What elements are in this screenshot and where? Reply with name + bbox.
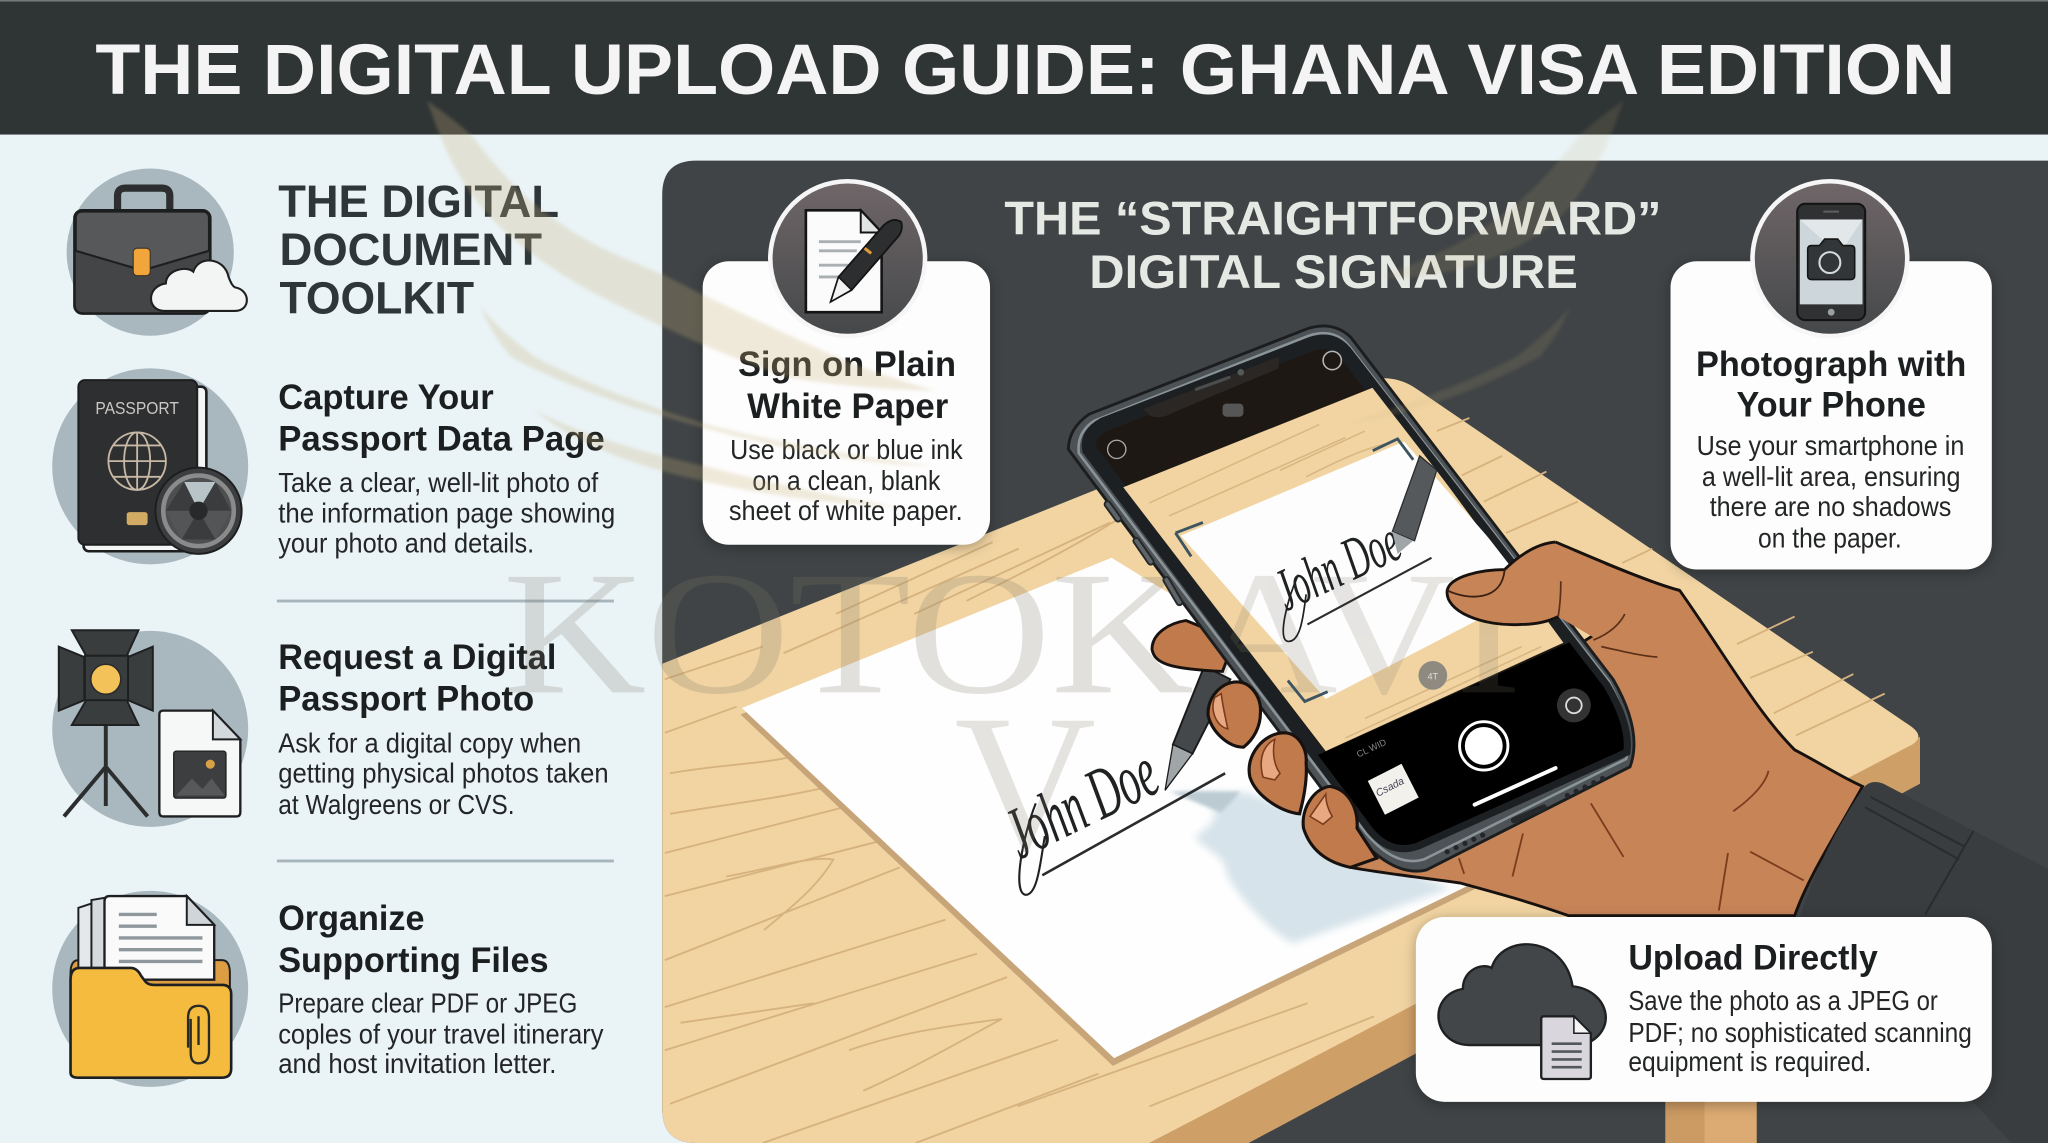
illustration: smartphone: CL WID bbox=[1355, 737, 1388, 759]
step: capture your passport data page: Capture Your bbox=[278, 378, 494, 417]
step: organize supporting files: Organize bbox=[278, 899, 424, 938]
callout: upload directly bbox=[1416, 917, 1992, 1102]
title banner bbox=[0, 0, 2048, 135]
heading: the digital document toolkit: TOOLKIT bbox=[280, 273, 474, 324]
step: organize supporting files: coples of your travel itinerary bbox=[278, 1019, 603, 1050]
step: capture your passport data page bbox=[278, 378, 615, 559]
dark panel background bbox=[662, 161, 2048, 1143]
phone screen camera view: KOTOKAVI bbox=[503, 536, 1522, 731]
step: request a digital passport photo: Request a Digital bbox=[278, 638, 556, 677]
step: capture your passport data page: Take a clear, well-lit photo of bbox=[278, 467, 598, 498]
icon: passport with lens bbox=[52, 368, 248, 564]
callout text: Use your smartphone in bbox=[1697, 430, 1964, 461]
callout text: Sign on Plain bbox=[738, 345, 956, 384]
phone screen camera view bbox=[1123, 357, 1624, 845]
callout text: Photograph with bbox=[1696, 345, 1966, 384]
illustration: fingers over phone bbox=[1208, 682, 1377, 867]
callout text bbox=[1628, 938, 1972, 1077]
signature on paper bbox=[992, 731, 1225, 895]
heading: the straightforward digital signature: DIGITAL SIGNATURE bbox=[1089, 245, 1578, 298]
callout: photograph with your phone bbox=[1671, 179, 1992, 570]
heading: the digital document toolkit: DOCUMENT bbox=[280, 224, 542, 275]
illustration: hand palm bbox=[1351, 543, 1863, 916]
heading: the straightforward digital signature bbox=[1004, 191, 1661, 298]
callout text: Use black or blue ink bbox=[730, 434, 963, 465]
step: capture your passport data page: the information page showing bbox=[278, 498, 615, 529]
step: capture your passport data page: your photo and details. bbox=[278, 528, 534, 559]
step: organize supporting files: and host invitation letter. bbox=[278, 1048, 556, 1079]
illustration: thumb over phone bbox=[1447, 542, 1680, 657]
step: request a digital passport photo: getting physical photos taken bbox=[278, 757, 609, 788]
callout text: on a clean, blank bbox=[752, 465, 941, 496]
callout text: on the paper. bbox=[1758, 522, 1902, 553]
callout text: Upload Directly bbox=[1628, 938, 1878, 977]
callout text: equipment is required. bbox=[1628, 1046, 1871, 1077]
step: organize supporting files bbox=[278, 899, 603, 1079]
step: request a digital passport photo: Ask for a digital copy when bbox=[278, 727, 581, 758]
illustration: sleeve cuff bbox=[1800, 782, 2048, 1143]
illustration: smartphone bbox=[1067, 324, 1636, 873]
signature in phone preview bbox=[1277, 532, 1432, 642]
step: capture your passport data page: Passport Data Page bbox=[278, 420, 605, 459]
callout text: Save the photo as a JPEG or bbox=[1628, 985, 1938, 1016]
callout text bbox=[729, 345, 963, 526]
callout text: a well-lit area, ensuring bbox=[1702, 461, 1960, 492]
illustration: finger behind phone bbox=[1152, 620, 1234, 671]
watermark lettering: V bbox=[955, 675, 1096, 892]
step: request a digital passport photo bbox=[278, 638, 609, 820]
panel: digital document toolkit bbox=[52, 169, 615, 1087]
callout text: Your Phone bbox=[1736, 386, 1926, 425]
callout text: White Paper bbox=[747, 387, 949, 426]
callout text: sheet of white paper. bbox=[729, 495, 963, 526]
icon: document and pen bbox=[768, 179, 927, 338]
step: request a digital passport photo: Passport Photo bbox=[278, 680, 534, 719]
step: request a digital passport photo: at Walgreens or CVS. bbox=[278, 789, 515, 820]
watermark lettering bbox=[503, 536, 1522, 892]
callout: sign on plain white paper bbox=[703, 179, 990, 545]
illustration: sheet of paper with signature bbox=[741, 558, 1567, 1066]
heading: the straightforward digital signature: THE “STRAIGHTFORWARD” bbox=[1004, 191, 1661, 244]
icon: cloud with document bbox=[1438, 944, 1606, 1079]
heading: the digital document toolkit: THE DIGITAL bbox=[278, 176, 559, 227]
icon: folder with documents bbox=[52, 891, 248, 1087]
signature on paper: John Doe bbox=[992, 731, 1170, 874]
watermark: wings bbox=[427, 101, 1624, 507]
watermark lettering: KOTOKAVI bbox=[503, 536, 1522, 731]
step: organize supporting files: Prepare clear PDF or JPEG bbox=[278, 987, 577, 1018]
illustration: smartphone: 4T bbox=[1427, 671, 1439, 681]
title banner: THE DIGITAL UPLOAD GUIDE: GHANA VISA EDITION bbox=[95, 30, 1955, 110]
illustration: smartphone: Csada bbox=[1374, 776, 1406, 800]
icon: phone with camera bbox=[1750, 179, 1910, 338]
callout text: there are no shadows bbox=[1710, 491, 1951, 522]
callout text bbox=[1696, 345, 1966, 553]
icon: studio lamp and photo file bbox=[52, 630, 248, 827]
illustration: wooden table bbox=[653, 378, 1920, 1143]
heading: the digital document toolkit bbox=[278, 176, 559, 324]
panel: straightforward digital signature bbox=[503, 161, 2048, 1143]
callout text: PDF; no sophisticated scanning bbox=[1628, 1017, 1972, 1048]
step: organize supporting files: Supporting Files bbox=[278, 941, 549, 980]
icon: passport with lens: PASSPORT bbox=[95, 398, 179, 418]
illustration: pen on paper bbox=[1165, 666, 1230, 790]
signature in phone preview: John Doe bbox=[1264, 507, 1410, 623]
icon: briefcase with cloud bbox=[67, 169, 247, 336]
